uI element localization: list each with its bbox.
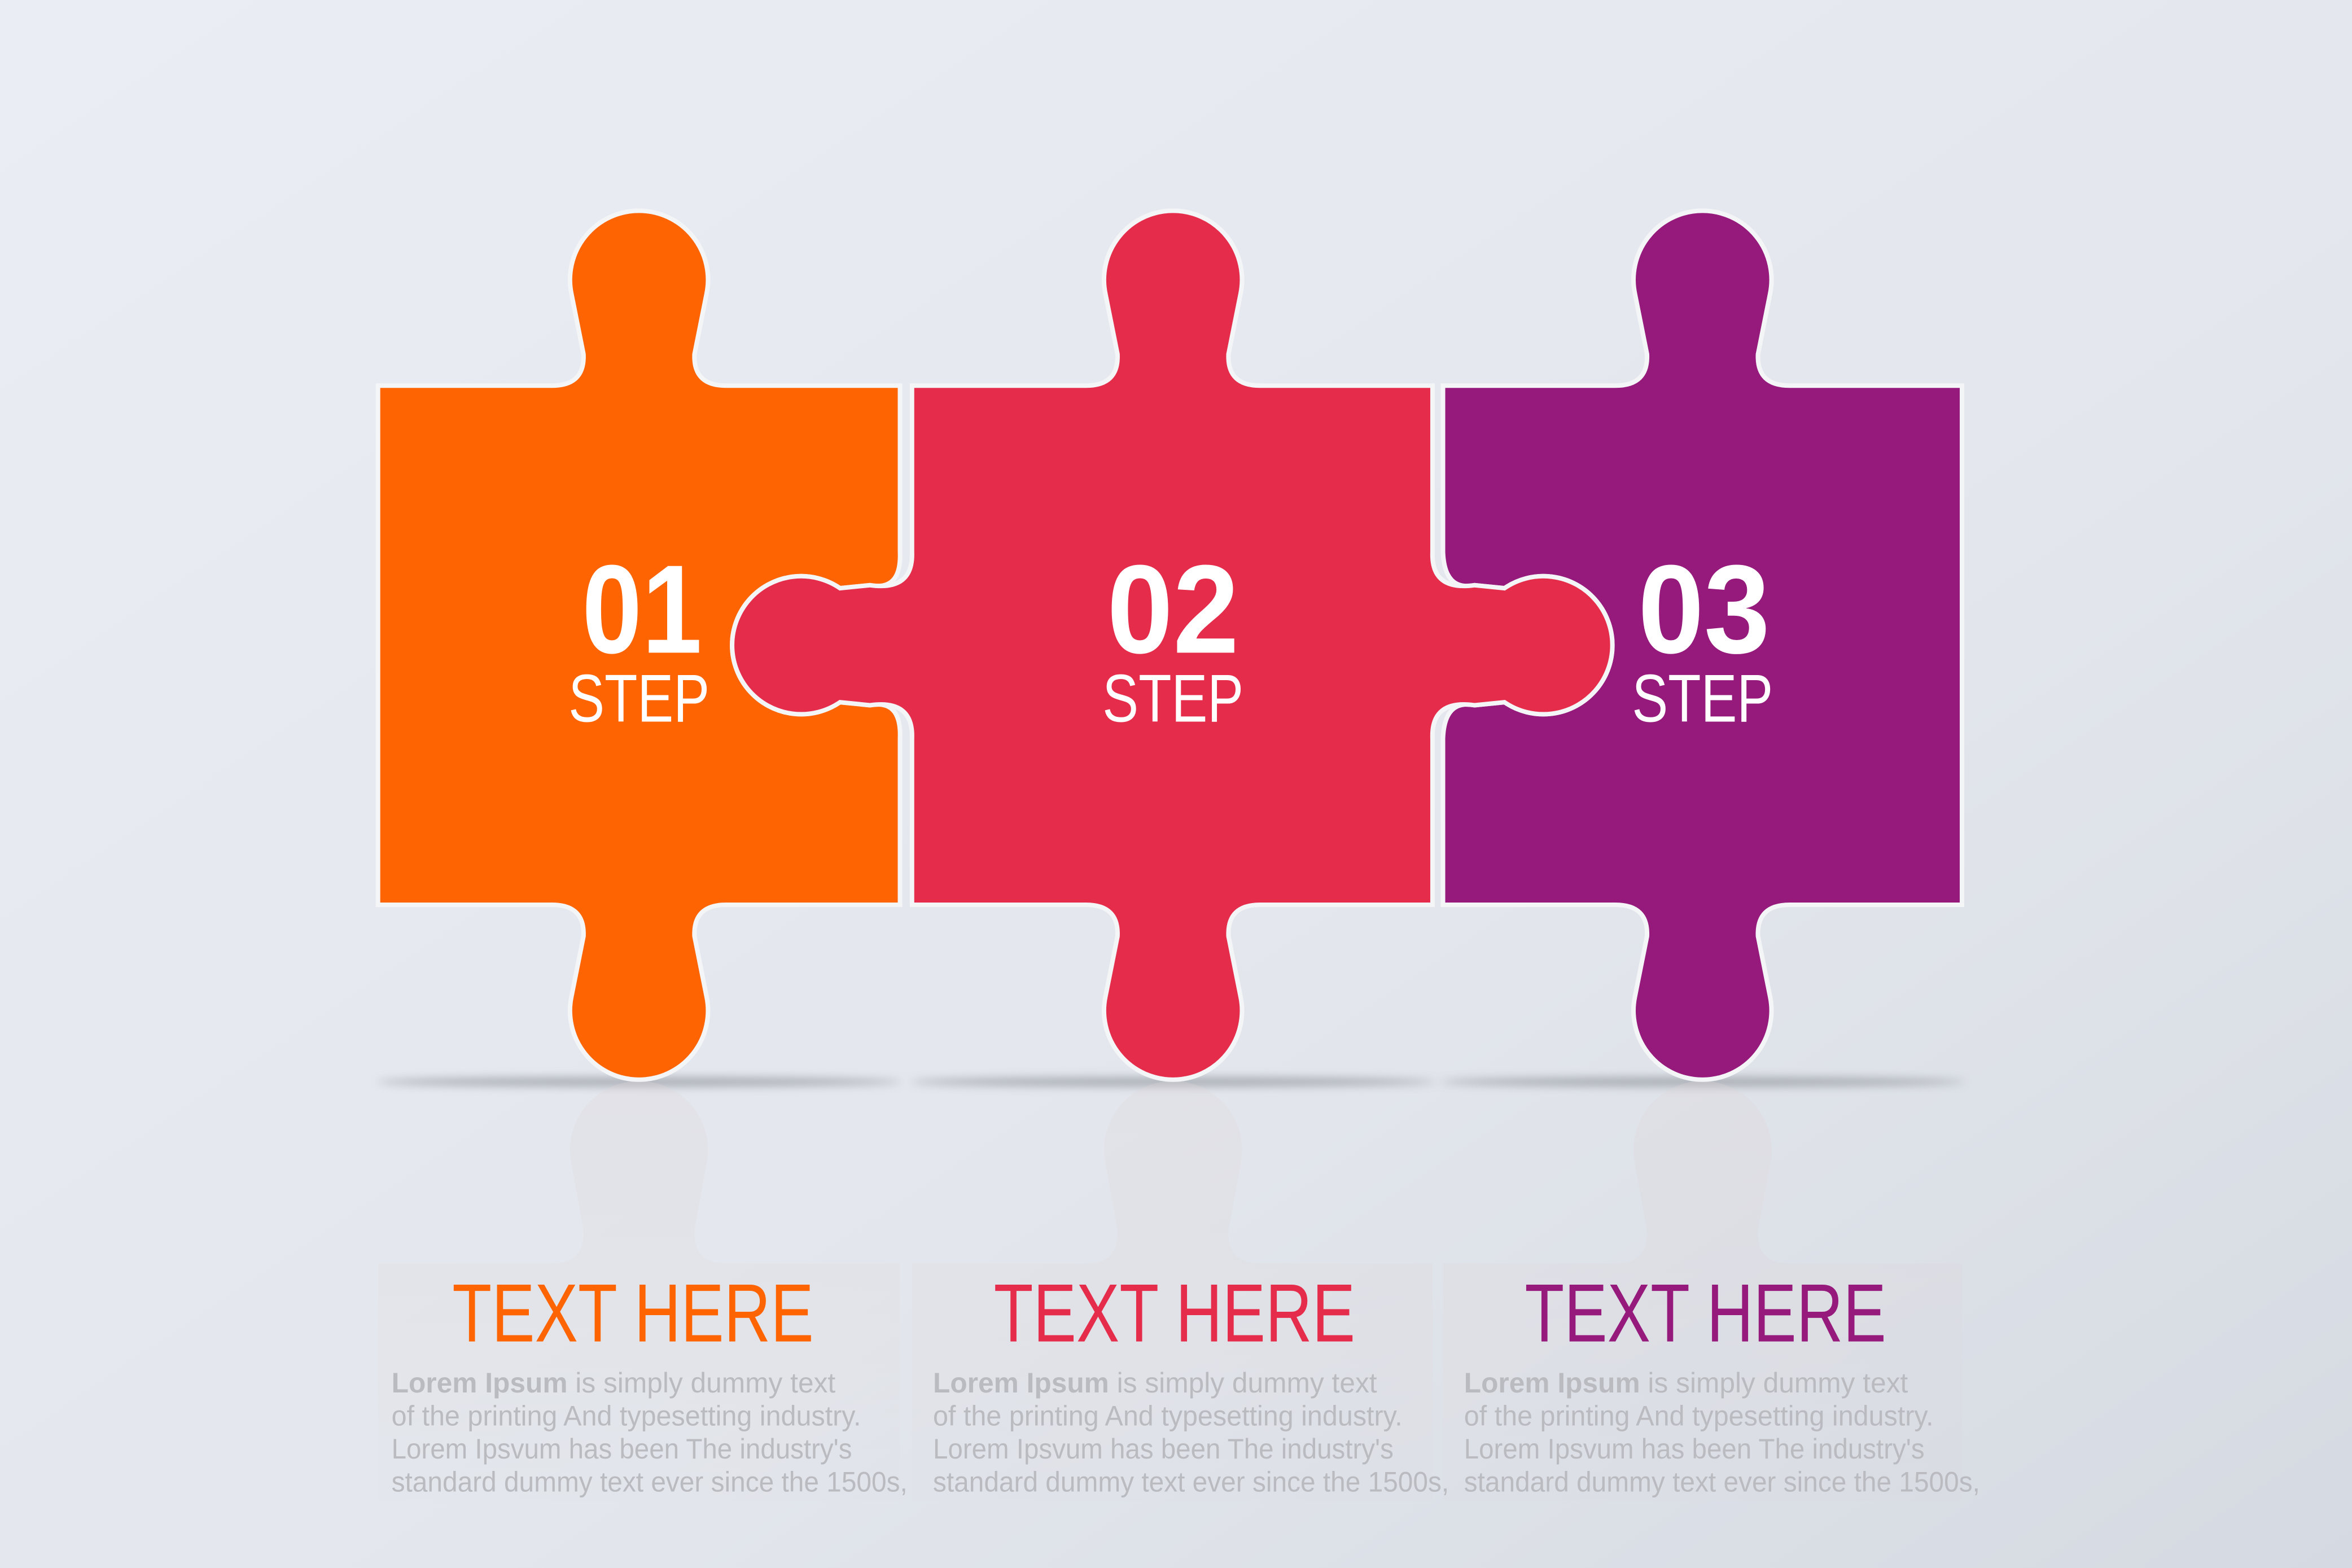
- text block 1: [392, 1267, 908, 1497]
- text block 1: standard dummy text ever since the 1500s,: [392, 1465, 908, 1497]
- text block 2: standard dummy text ever since the 1500s,: [933, 1465, 1449, 1497]
- number 02: 02: [1107, 539, 1239, 680]
- text block 3: of the printing And typesetting industry.: [1464, 1399, 1934, 1431]
- text block 3: Lorem Ipsvum has been The industry's: [1464, 1433, 1925, 1465]
- text block 2: TEXT HERE: [994, 1267, 1355, 1359]
- shadows under pieces: [376, 1078, 1965, 1087]
- text block 3: TEXT HERE: [1525, 1267, 1886, 1359]
- text block 1: Lorem Ipsvum has been The industry's: [392, 1433, 852, 1465]
- text block 2: [933, 1267, 1449, 1497]
- piece 2: red: [732, 211, 1613, 1080]
- label STEP 1: STEP: [568, 662, 709, 737]
- text block 1: TEXT HERE: [452, 1267, 814, 1359]
- text block 1: Lorem Ipsum is simply dummy text: [392, 1366, 835, 1399]
- piece 3: purple: [1443, 211, 1962, 1080]
- reflections: [378, 1081, 1962, 1500]
- text block 3: [1464, 1267, 1980, 1497]
- text block 3: standard dummy text ever since the 1500s,: [1464, 1465, 1980, 1497]
- piece 1: orange: [378, 211, 900, 1080]
- text block 2: Lorem Ipsvum has been The industry's: [933, 1433, 1394, 1465]
- label STEP 3: STEP: [1632, 662, 1773, 737]
- text block 2: of the printing And typesetting industry.: [933, 1399, 1403, 1431]
- text block 3: Lorem Ipsum is simply dummy text: [1464, 1366, 1908, 1399]
- label STEP 2: STEP: [1102, 662, 1243, 737]
- number 01: 01: [582, 539, 702, 680]
- text block 2: Lorem Ipsum is simply dummy text: [933, 1366, 1377, 1399]
- text block 1: of the printing And typesetting industry.: [392, 1399, 861, 1431]
- number 03: 03: [1638, 539, 1770, 680]
